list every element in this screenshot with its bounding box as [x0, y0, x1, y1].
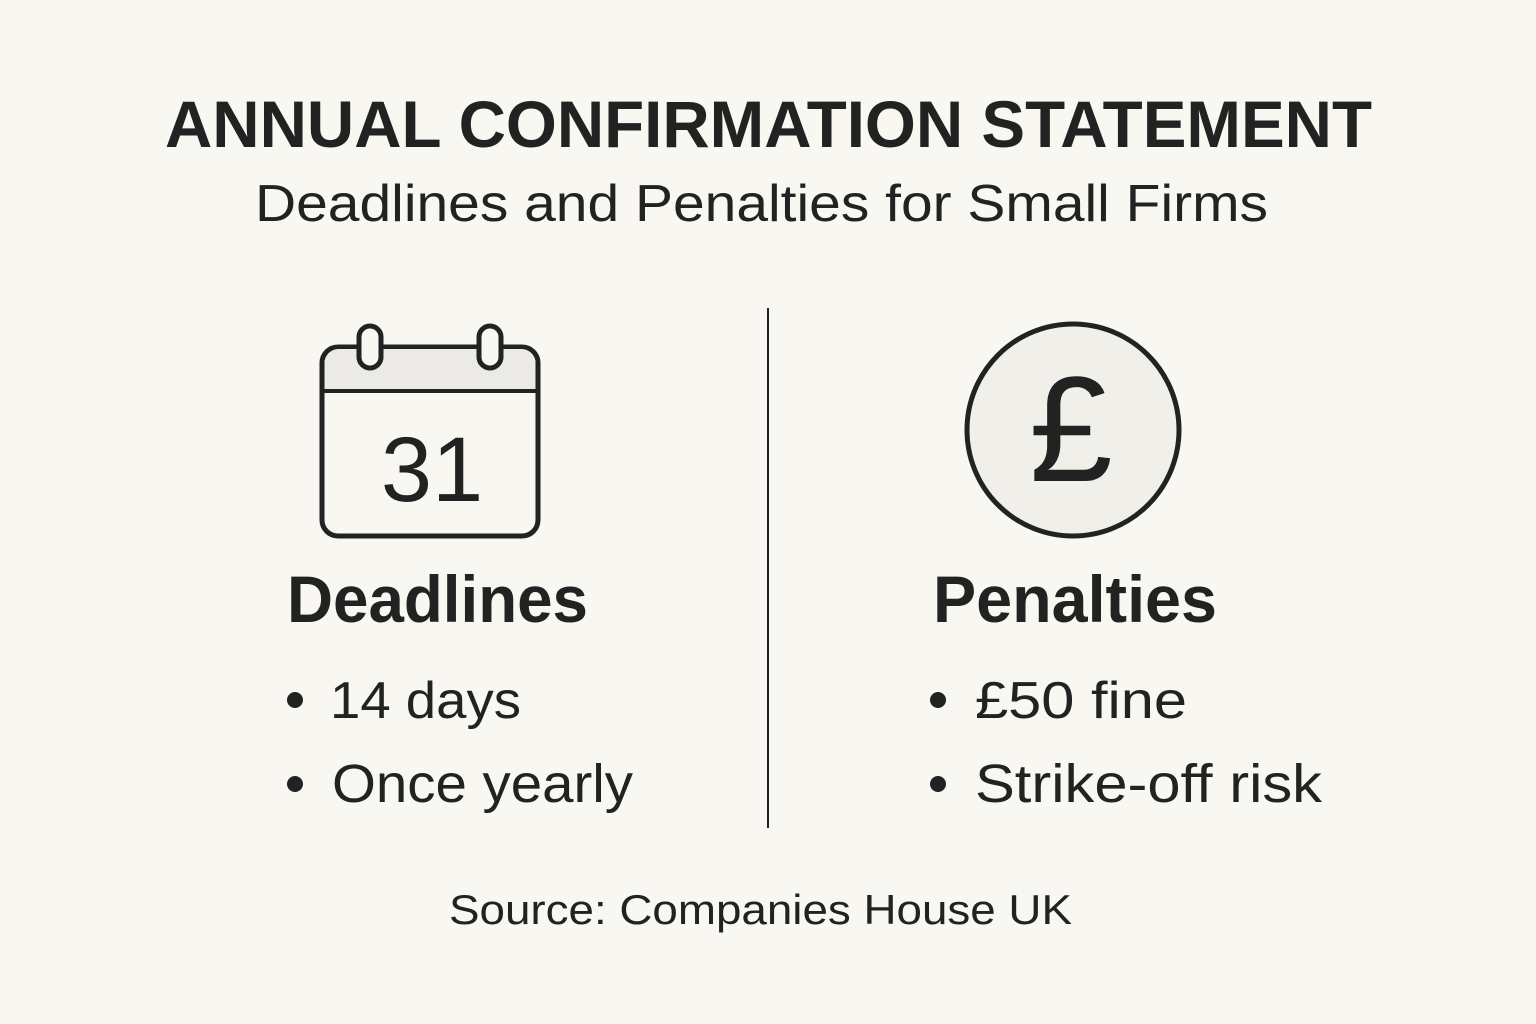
divider — [767, 308, 769, 828]
source: Source: Companies House UK — [449, 886, 1072, 933]
icon: calendar: 31 — [381, 419, 483, 521]
panel: deadlines: 14 days — [330, 672, 521, 730]
icon: calendar — [322, 326, 538, 536]
panel: penalties: £50 fine — [975, 672, 1187, 730]
panel: penalties: Strike-off risk — [975, 754, 1323, 814]
panel: deadlines: Deadlines — [287, 562, 588, 636]
title: ANNUAL CONFIRMATION STATEMENT — [165, 87, 1372, 161]
icon: pound coin: £ — [1029, 345, 1113, 513]
subtitle: Deadlines and Penalties for Small Firms — [255, 175, 1268, 233]
panel: deadlines: Once yearly — [332, 754, 633, 814]
icon: pound coin — [967, 324, 1179, 536]
panel: penalties — [930, 562, 1323, 814]
panel: deadlines — [287, 562, 633, 814]
panel: penalties: Penalties — [933, 562, 1217, 636]
